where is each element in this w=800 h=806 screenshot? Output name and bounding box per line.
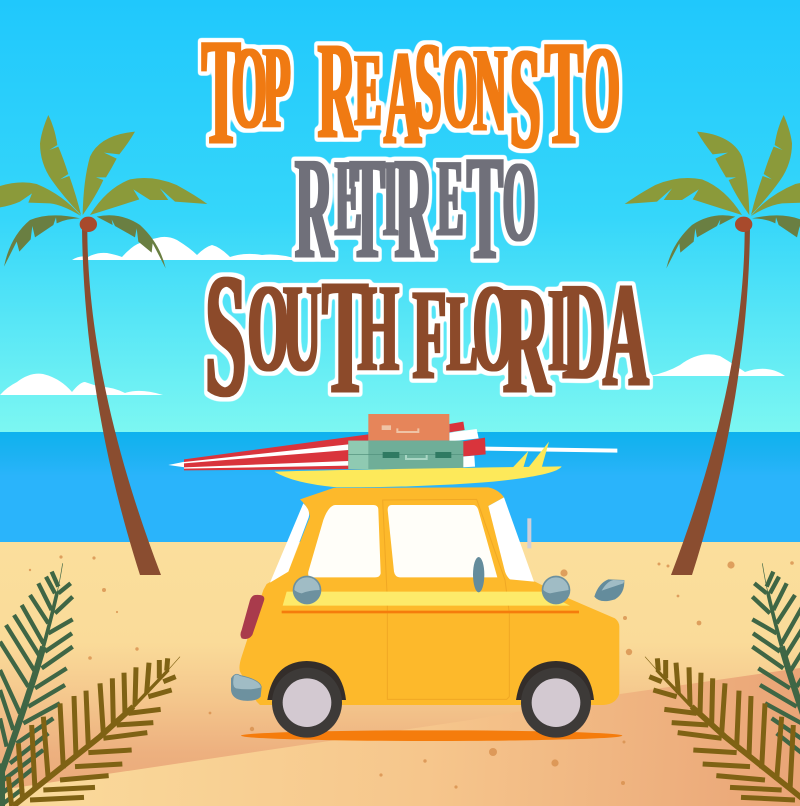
- yellow car with luggage: [168, 414, 624, 741]
- windshield: [488, 497, 534, 582]
- sea: [0, 432, 800, 543]
- title line 2: T: [350, 127, 385, 289]
- orange body line: [282, 611, 579, 613]
- surfboard: [274, 442, 562, 487]
- left ferns: [0, 563, 180, 806]
- title line 2: R: [295, 127, 334, 289]
- title line 1: R: [318, 13, 357, 167]
- title line 1: T: [545, 9, 583, 176]
- door outline: [383, 499, 509, 699]
- right palm trunk: [671, 228, 750, 575]
- left palm coconut: [80, 217, 97, 232]
- side window rear: [308, 505, 381, 577]
- right palm lower fronds: [666, 215, 800, 268]
- lamp highlights: [294, 577, 569, 593]
- title line 3: S: [205, 236, 247, 434]
- orange suitcase: [368, 414, 449, 441]
- left palm upper fronds: [0, 115, 207, 216]
- beach umbrella: [168, 422, 617, 470]
- title line 3: R: [503, 254, 551, 426]
- title line 2: E: [437, 137, 473, 259]
- right green fern: [752, 563, 800, 777]
- green suitcase: [348, 441, 463, 469]
- title line 1: T: [202, 8, 241, 177]
- car body: [239, 487, 619, 705]
- rear lamp: [293, 576, 321, 604]
- title line 1: S: [415, 18, 441, 156]
- title line 2: O: [503, 138, 535, 265]
- front lamp: [542, 576, 570, 604]
- title line 3: U: [283, 259, 321, 397]
- right ferns: [645, 563, 800, 806]
- title line 1: S: [510, 17, 554, 179]
- title line 3: F: [413, 262, 446, 407]
- rear wheel: [267, 661, 346, 738]
- title line 3: L: [447, 274, 478, 395]
- right olive fern: [645, 657, 800, 806]
- front wheel: [516, 661, 594, 738]
- rear window: [270, 503, 309, 583]
- left palm lower fronds: [4, 215, 166, 268]
- title line 2: R: [395, 127, 434, 289]
- antenna: [527, 518, 531, 548]
- title line 3: O: [473, 259, 514, 397]
- sky background: [0, 0, 800, 432]
- title line 3: A: [603, 251, 649, 418]
- title line 3: T: [322, 246, 368, 429]
- title line 2: T: [467, 126, 503, 291]
- sand speckles: [29, 555, 794, 789]
- tail light: [240, 595, 264, 639]
- left olive fern: [8, 657, 180, 806]
- title line 3: O: [248, 259, 289, 397]
- title line 3: H: [358, 259, 412, 397]
- yellow body stripe: [283, 592, 570, 606]
- title line 1: P: [263, 23, 299, 153]
- wing mirror: [594, 579, 624, 601]
- car ground shadow: [241, 730, 622, 741]
- left palm tree: [0, 115, 207, 575]
- title line 1: O: [443, 24, 477, 152]
- left green fern: [0, 563, 73, 806]
- rear bumper: [231, 674, 262, 701]
- title line 2: E: [335, 137, 362, 259]
- right palm tree: [625, 115, 800, 575]
- title line 1: E: [355, 32, 382, 149]
- title line 1: A: [384, 24, 421, 173]
- right palm coconut: [735, 217, 752, 232]
- title line 1: O: [585, 23, 620, 153]
- side window front: [388, 505, 497, 577]
- left palm trunk: [82, 228, 161, 575]
- sand beach: [0, 542, 800, 806]
- title line 2: I: [383, 137, 398, 259]
- title line 3: I: [548, 263, 568, 396]
- title line 1: N: [474, 23, 507, 156]
- clouds: [0, 237, 785, 395]
- door mirror: [473, 557, 484, 592]
- title: [202, 8, 649, 434]
- right palm upper fronds: [625, 115, 800, 216]
- title line 3: D: [563, 254, 605, 409]
- title line 1: O: [232, 23, 267, 153]
